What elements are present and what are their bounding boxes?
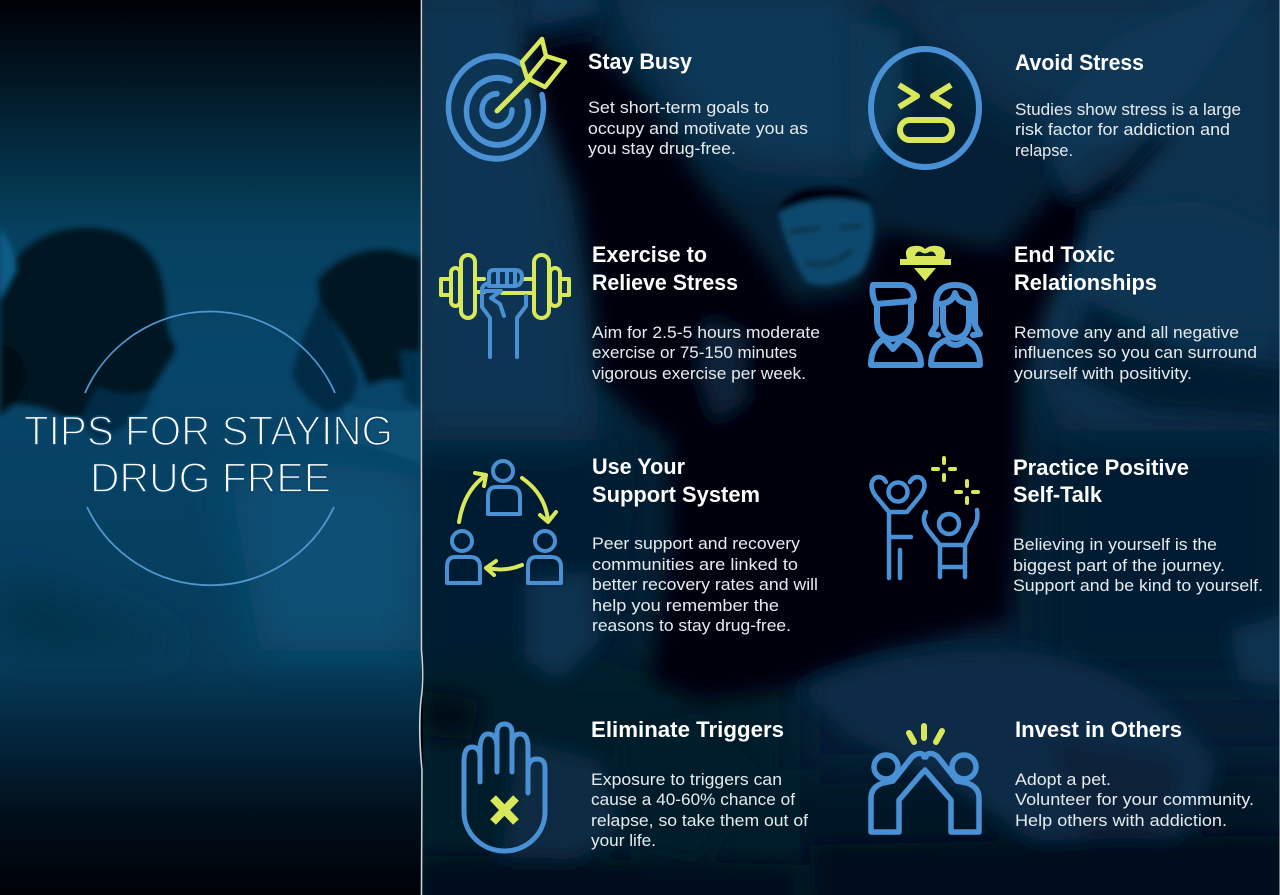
body text: Volunteer for your community.: [1015, 790, 1254, 809]
heading: Use Your: [592, 454, 685, 479]
body text: [1015, 770, 1254, 830]
icon: target with arrow: [448, 39, 565, 159]
body text: cause a 40-60% chance of: [591, 790, 795, 809]
tip: Eliminate Triggers: [464, 717, 808, 851]
title: [24, 407, 393, 501]
man hair and face, right: [318, 250, 421, 392]
icon: two cheering figures: [872, 458, 978, 578]
body text: your life.: [591, 831, 656, 850]
body text: Exposure to triggers can: [591, 770, 782, 789]
heading: [1013, 455, 1189, 507]
heading: Practice Positive: [1013, 455, 1189, 480]
wrist and bracelet: [530, 0, 600, 34]
body text: [1014, 323, 1257, 383]
body text: Help others with addiction.: [1015, 811, 1227, 830]
body text: [591, 770, 808, 850]
body text: yourself with positivity.: [1014, 364, 1192, 383]
body text: Peer support and recovery: [592, 534, 801, 553]
tip: Invest in Others: [871, 717, 1254, 832]
body text: [592, 534, 818, 635]
icon: support circle: [447, 461, 561, 583]
heading: Avoid Stress: [1015, 50, 1144, 75]
body text: Remove any and all negative: [1014, 323, 1239, 342]
sitting knee: [800, 650, 1215, 880]
tip: Use Your Support System: [447, 454, 818, 635]
body text: Adopt a pet.: [1015, 770, 1111, 789]
heading: Eliminate Triggers: [591, 717, 784, 742]
heading: Invest in Others: [1015, 717, 1182, 742]
body text: you stay drug-free.: [588, 139, 736, 158]
heading: [592, 242, 738, 295]
face: [778, 196, 874, 285]
body text: reasons to stay drug-free.: [592, 616, 791, 635]
body text: [1013, 535, 1263, 595]
heading: Stay Busy: [588, 49, 693, 74]
body text: influences so you can surround: [1014, 343, 1257, 362]
heading: Support System: [592, 482, 760, 507]
body text: [1015, 100, 1241, 160]
body text: help you remember the: [592, 596, 779, 615]
body text: Aim for 2.5-5 hours moderate: [592, 323, 820, 342]
tip: Avoid Stress: [871, 49, 1241, 167]
right raised arm: [1040, 0, 1262, 200]
title circle arcs: [85, 311, 335, 585]
heading: Self-Talk: [1013, 482, 1103, 507]
body text: Support and be kind to yourself.: [1013, 576, 1263, 595]
icon: stop hand with x: [464, 724, 545, 851]
body text: relapse, so take them out of: [591, 811, 808, 830]
body text: relapse.: [1015, 141, 1073, 160]
heading: Relieve Stress: [592, 270, 738, 295]
body text: [592, 323, 820, 383]
right foliage: [1080, 200, 1280, 335]
tip: Exercise to Relieve Stress: [441, 242, 820, 383]
heading: [1014, 242, 1157, 295]
heading: Exercise to: [592, 242, 707, 267]
heading: End Toxic: [1014, 242, 1115, 267]
panel divider line: [420, 0, 423, 895]
title: DRUG FREE: [90, 454, 331, 501]
body text: Studies show stress is a large: [1015, 100, 1241, 119]
body text: vigorous exercise per week.: [592, 364, 806, 383]
body text: biggest part of the journey.: [1013, 556, 1225, 575]
woman body silhouette with raised arms: [525, 40, 1170, 700]
blurred leaves left bottom: [525, 570, 600, 680]
panel: left photo background: [0, 0, 421, 895]
body text: communities are linked to: [592, 555, 798, 574]
woman hair and face, left: [0, 228, 175, 420]
body text: occupy and motivate you as: [588, 119, 808, 138]
panel: right photo background: [400, 0, 1280, 895]
body text: [588, 98, 808, 158]
icon: stressed face: [871, 49, 979, 167]
icon: high five: [871, 726, 979, 832]
tip: End Toxic Relationships: [871, 242, 1257, 383]
people silhouettes: [0, 228, 421, 465]
body text: Set short-term goals to: [588, 98, 769, 117]
heading: Relationships: [1014, 270, 1157, 295]
body text: exercise or 75-150 minutes: [592, 343, 797, 362]
heading: [592, 454, 760, 507]
body text: better recovery rates and will: [592, 575, 818, 594]
body text: risk factor for addiction and: [1015, 120, 1230, 139]
tip: Practice Positive Self-Talk: [872, 455, 1263, 595]
body text: Believing in yourself is the: [1013, 535, 1217, 554]
icon: broken heart couple: [871, 246, 980, 365]
icon: fist with dumbbell: [441, 255, 569, 357]
tip: Stay Busy: [448, 39, 808, 159]
title: TIPS FOR STAYING: [24, 407, 393, 454]
